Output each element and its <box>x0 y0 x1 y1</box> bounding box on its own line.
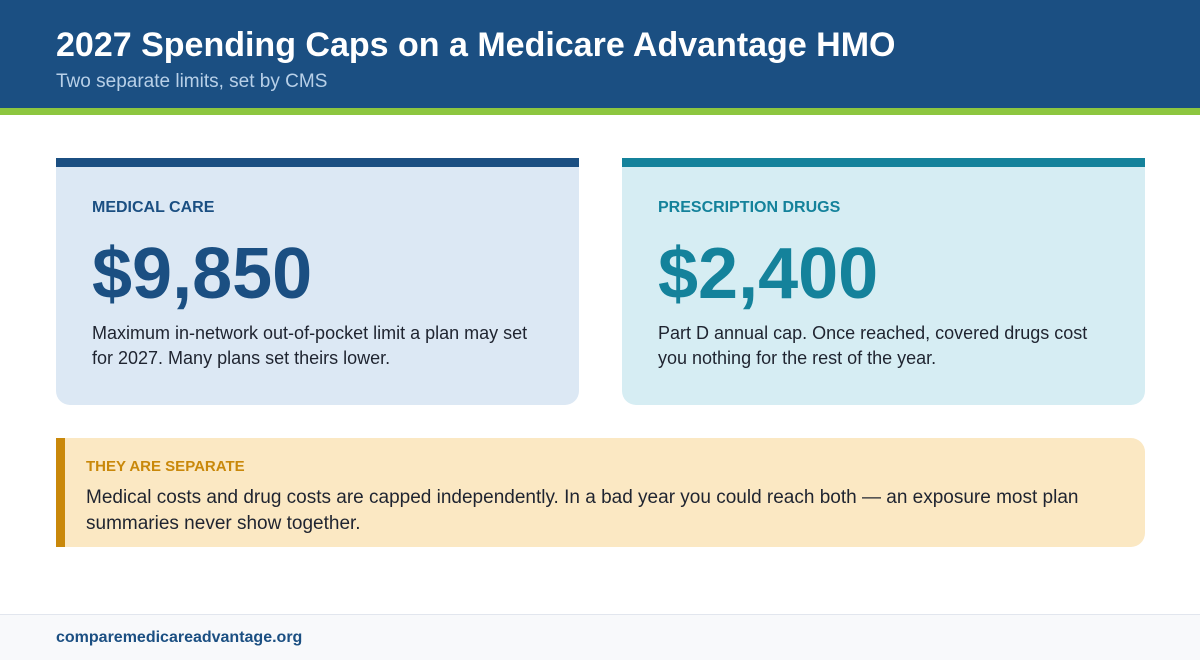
callout body: summaries never show together. <box>86 513 361 534</box>
medical care description <box>92 323 527 368</box>
title: 2027 Spending Caps on a Medicare Advantage HMO <box>56 26 896 64</box>
medical care label: MEDICAL CARE <box>92 199 214 216</box>
medical care amount: $9,850 <box>92 234 312 314</box>
callout body <box>86 487 1078 534</box>
subtitle: Two separate limits, set by CMS <box>56 71 327 92</box>
callout heading: THEY ARE SEPARATE <box>86 458 245 475</box>
prescription drugs label: PRESCRIPTION DRUGS <box>658 199 840 216</box>
prescription drugs description <box>658 323 1088 368</box>
panel: prescription drugs <box>622 158 1145 405</box>
callout body: Medical costs and drug costs are capped independently. In a bad year you could reach both — an exposure most plan <box>86 487 1078 508</box>
header band <box>0 0 1200 115</box>
medical care description: for 2027. Many plans set theirs lower. <box>92 348 390 368</box>
footer <box>0 614 1200 660</box>
prescription drugs description: Part D annual cap. Once reached, covered drugs cost <box>658 323 1087 343</box>
prescription drugs amount: $2,400 <box>658 234 878 314</box>
prescription drugs description: you nothing for the rest of the year. <box>658 348 936 368</box>
callout: they are separate <box>56 438 1145 547</box>
panel: medical care <box>56 158 579 405</box>
footer url: comparemedicareadvantage.org <box>56 629 302 646</box>
medical care description: Maximum in-network out-of-pocket limit a plan may set <box>92 323 527 343</box>
